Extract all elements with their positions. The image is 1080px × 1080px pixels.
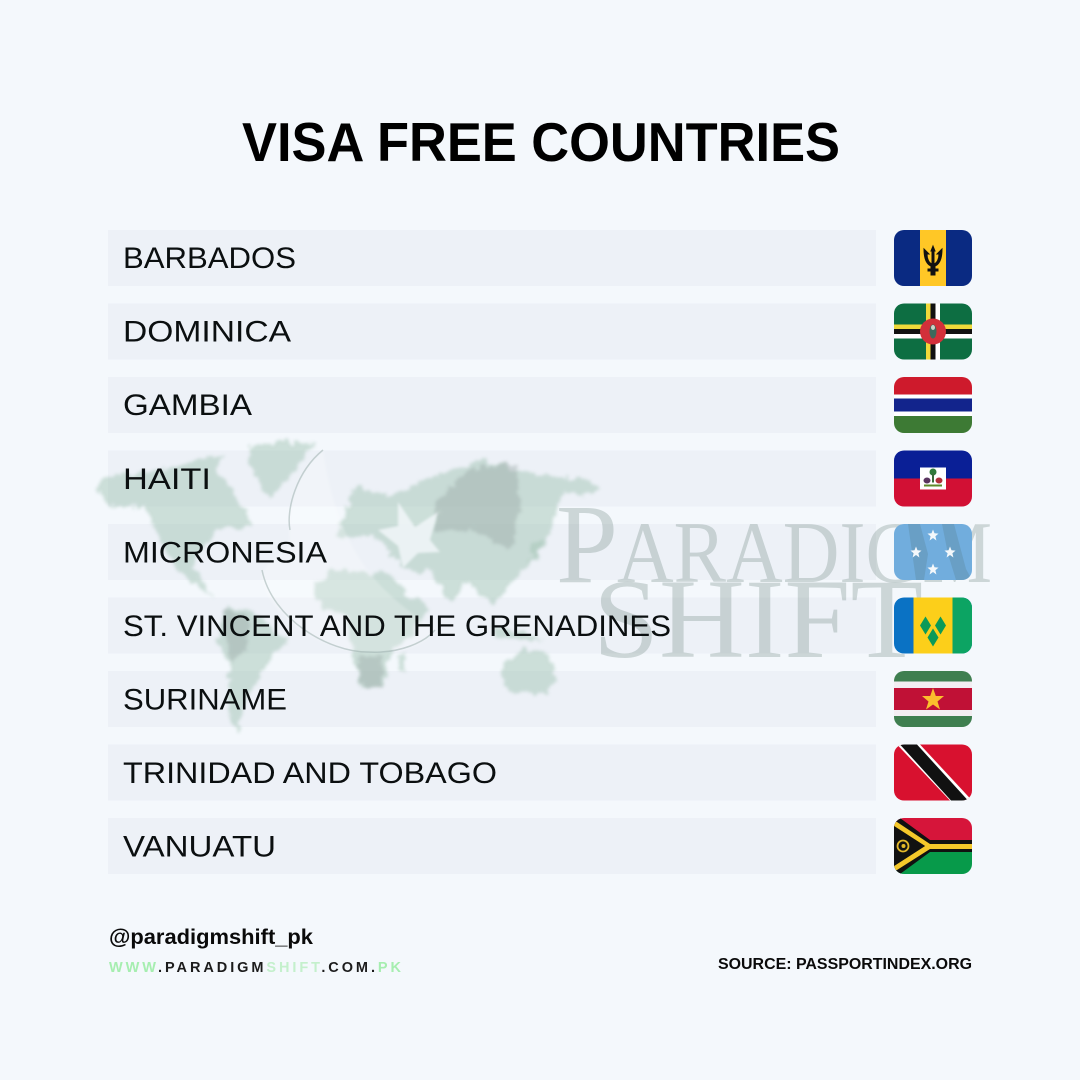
flag: Micronesia — [894, 524, 972, 580]
row backgrounds — [108, 230, 876, 874]
country: Gambia: GAMBIA — [123, 389, 252, 422]
watermark: Paradigm Shift wordmark — [556, 482, 992, 682]
country: Suriname: SURINAME — [123, 684, 287, 716]
flag: Dominica — [894, 304, 972, 360]
flag: St. Vincent and the Grenadines — [894, 598, 972, 654]
source note: SOURCE: PASSPORTINDEX.ORG — [718, 956, 972, 973]
flag: Trinidad and Tobago — [894, 744, 972, 800]
flag: Barbados — [894, 230, 972, 286]
flag: Haiti — [894, 450, 972, 506]
watermark: world map — [97, 440, 600, 733]
website url: WWW.PARADIGMSHIFT.COM.PK — [109, 960, 402, 976]
social handle: @paradigmshift_pk — [109, 926, 313, 949]
country: Micronesia: MICRONESIA — [123, 536, 327, 570]
flag: Suriname — [894, 671, 972, 727]
country: Haiti: HAITI — [123, 463, 211, 496]
country: St. Vincent and the Grenadines: ST. VINCENT AND THE GRENADINES — [123, 610, 671, 643]
watermark: Paradigm Shift wordmark: ARADIGM — [617, 505, 992, 602]
flag: Vanuatu — [894, 818, 972, 874]
country: Vanuatu: VANUATU — [123, 830, 276, 864]
country: Barbados: BARBADOS — [123, 242, 296, 275]
flag: Gambia — [894, 377, 972, 433]
country: Trinidad and Tobago: TRINIDAD AND TOBAGO — [123, 757, 497, 790]
title: VISA FREE COUNTRIES — [242, 111, 840, 173]
watermark: Paradigm Shift wordmark: SHIFT — [593, 557, 923, 682]
country: Dominica: DOMINICA — [123, 316, 291, 348]
watermark: crescent and star — [261, 450, 440, 652]
watermark: Paradigm Shift wordmark: P — [556, 482, 618, 607]
